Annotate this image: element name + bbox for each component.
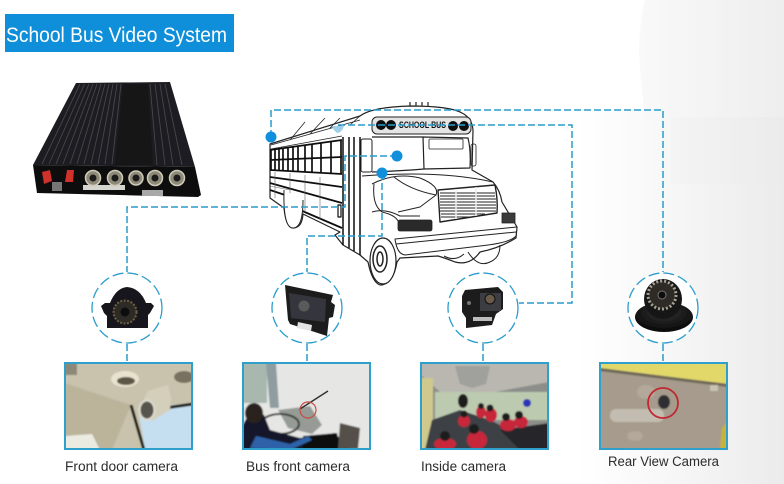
- photo: rear view camera: [600, 363, 728, 450]
- caption: inside camera: Inside camera: [421, 459, 506, 474]
- camera circle: rear view: [628, 273, 698, 343]
- camera circle: bus front: [272, 273, 342, 343]
- caption: bus front camera: Bus front camera: [246, 459, 350, 474]
- camera circle: inside: [448, 273, 518, 343]
- bus location markers: [266, 126, 402, 178]
- dashed connector lines: [127, 110, 663, 363]
- DVR recorder device: [33, 82, 201, 197]
- caption: rear view camera: Rear View Camera: [608, 454, 719, 469]
- caption: front door camera: Front door camera: [65, 459, 178, 474]
- title banner: School Bus Video System: [6, 23, 227, 47]
- title banner: [5, 14, 234, 52]
- photo: bus front camera: [243, 363, 371, 450]
- school bus line drawing: [270, 102, 517, 285]
- photo: front door camera: [65, 363, 194, 450]
- camera circle: front door: [92, 273, 162, 343]
- photo: inside camera: [421, 363, 549, 450]
- school bus sign text: SCHOOL BUS: [399, 120, 446, 130]
